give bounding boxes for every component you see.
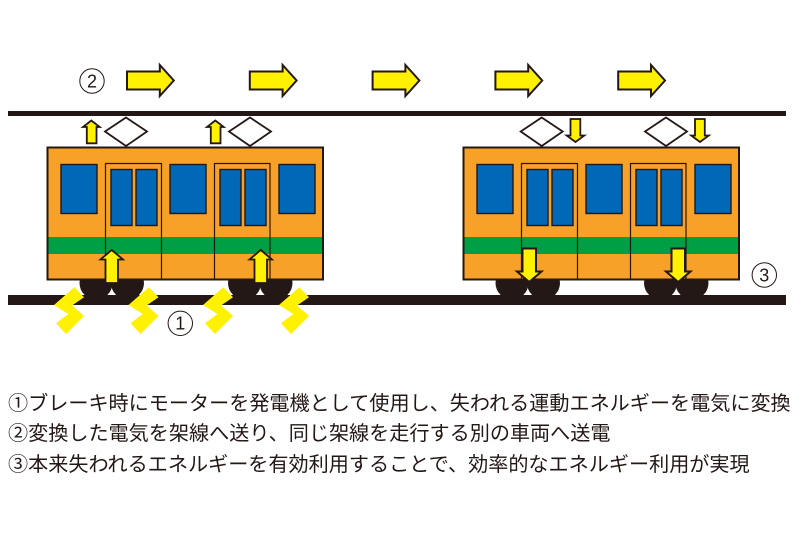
overhead wire bbox=[8, 111, 786, 116]
bolt 2 bbox=[128, 287, 158, 334]
circled number 2: 2 bbox=[87, 71, 97, 91]
arrow 1 bbox=[127, 65, 174, 96]
train 2: receiving power bbox=[464, 118, 739, 300]
small down arrows bbox=[567, 119, 709, 142]
arrow 4 bbox=[495, 65, 542, 96]
bolt 3 bbox=[203, 287, 233, 334]
large up arrows bbox=[100, 250, 272, 283]
circled number 1: 1 bbox=[175, 314, 185, 334]
small up arrows bbox=[83, 120, 224, 143]
pantographs bbox=[521, 118, 687, 146]
large down arrows bbox=[517, 248, 690, 282]
arrow 2 bbox=[250, 65, 297, 96]
line 2: ②変換した電気を架線へ送り、同じ架線を走行する別の車両へ送電 bbox=[8, 422, 610, 445]
rail bbox=[8, 295, 786, 305]
lightning bolts at rail bbox=[54, 287, 309, 334]
arrow 5 bbox=[618, 65, 665, 96]
car body bbox=[464, 148, 739, 280]
pantographs bbox=[105, 118, 271, 146]
arrow 3 bbox=[373, 65, 419, 96]
power flow arrows along wire bbox=[127, 65, 665, 96]
circled number 3 bbox=[752, 263, 776, 287]
explanation text bbox=[8, 391, 791, 476]
circled number 1 bbox=[168, 311, 192, 335]
circled number 3: 3 bbox=[759, 265, 769, 285]
wheels bbox=[496, 266, 708, 300]
line 3: ③本来失われるエネルギーを有効利用することで、効率的なエネルギー利用が実現 bbox=[8, 453, 750, 476]
line 1: ①ブレーキ時にモーターを発電機として使用し、失われる運動エネルギーを電気に変換 bbox=[8, 391, 791, 415]
wheels bbox=[80, 266, 292, 300]
bolt 4 bbox=[279, 287, 309, 334]
circled number 2 bbox=[80, 69, 104, 93]
bolt 1 bbox=[54, 287, 84, 334]
car body bbox=[48, 148, 323, 280]
train 1: braking, generating power bbox=[48, 118, 323, 300]
